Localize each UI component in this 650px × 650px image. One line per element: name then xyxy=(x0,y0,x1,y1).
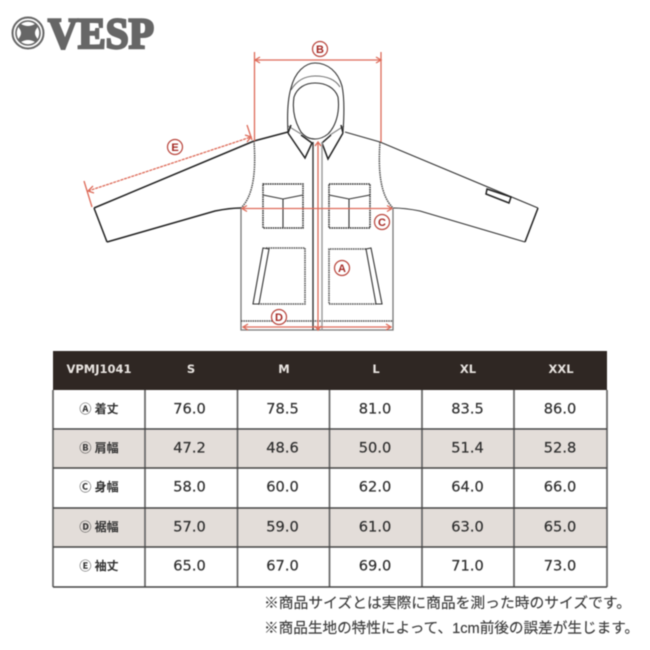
jacket body xyxy=(241,141,393,330)
row D: hem width: Ⓓ 裾幅 xyxy=(79,519,119,534)
right chest pocket xyxy=(329,184,370,228)
row E: sleeve length: 69.0 xyxy=(359,558,391,574)
left sleeve xyxy=(94,132,288,242)
row B: shoulder width: 48.6 xyxy=(266,440,299,456)
logo wordmark: VESP xyxy=(48,11,154,58)
row C: body width: 66.0 xyxy=(544,478,576,496)
table grid xyxy=(53,390,607,587)
measurement B: shoulder width xyxy=(254,42,381,142)
table header row: XXL xyxy=(548,362,574,376)
collar xyxy=(288,125,343,159)
row A: length: Ⓐ 着丈 xyxy=(79,401,119,416)
right lower pocket xyxy=(329,248,382,304)
row B: shoulder width: 51.4 xyxy=(451,440,484,456)
row C: body width: 60.0 xyxy=(266,478,299,496)
row C: body width: 62.0 xyxy=(359,478,391,496)
hood xyxy=(288,63,344,139)
size table xyxy=(53,351,607,587)
table header row xyxy=(53,351,607,390)
measurement E: sleeve length xyxy=(84,125,252,207)
table header row: L xyxy=(372,362,380,376)
measurement A: length xyxy=(315,142,350,330)
row A: length: 78.5 xyxy=(266,400,299,418)
table header row: VPMJ1041 xyxy=(66,362,132,376)
row D: hem width: 65.0 xyxy=(544,518,576,536)
row E: sleeve length: 65.0 xyxy=(173,558,206,574)
row E: sleeve length: 71.0 xyxy=(451,558,484,574)
row A: length: 81.0 xyxy=(359,400,391,418)
measurement E: sleeve length: E xyxy=(171,142,179,154)
measurement D: hem width xyxy=(243,310,391,330)
table header row: XL xyxy=(460,362,477,376)
row B: shoulder width: 50.0 xyxy=(359,440,391,456)
logo: VESP xyxy=(12,11,154,58)
table header row: S xyxy=(187,362,195,376)
row B: shoulder width: 47.2 xyxy=(173,440,206,456)
row B: shoulder width: 52.8 xyxy=(544,440,576,456)
row C: body width: Ⓒ 身幅 xyxy=(79,479,119,494)
right sleeve xyxy=(345,132,538,242)
row A: length: 83.5 xyxy=(451,400,484,418)
footnote 2: ※商品生地の特性によって、1cm前後の誤差が生じます。 xyxy=(264,620,639,637)
row A: length: 76.0 xyxy=(173,400,206,418)
row E: sleeve length: 67.0 xyxy=(266,558,299,574)
shaded row backgrounds xyxy=(54,430,607,547)
jacket technical drawing xyxy=(94,63,538,330)
row C: body width: 64.0 xyxy=(451,478,484,496)
row D: hem width: 57.0 xyxy=(173,518,206,536)
row E: sleeve length xyxy=(79,558,576,574)
sleeve patch xyxy=(486,189,511,203)
row C: body width: 58.0 xyxy=(173,478,206,496)
row C: body width xyxy=(79,478,576,496)
measurement C: body width xyxy=(242,206,392,230)
row A: length xyxy=(79,400,576,418)
left lower pocket xyxy=(253,248,305,304)
row D: hem width: 61.0 xyxy=(359,518,391,536)
row E: sleeve length: Ⓔ 袖丈 xyxy=(79,558,119,573)
measurement C: body width: C xyxy=(378,217,386,229)
logo emblem xyxy=(12,18,44,48)
table header row: M xyxy=(278,362,290,376)
row A: length: 86.0 xyxy=(544,400,576,418)
row D: hem width: 59.0 xyxy=(266,518,299,536)
left chest pocket xyxy=(263,184,303,228)
measurement B: shoulder width: B xyxy=(316,44,324,56)
footnotes xyxy=(264,595,639,637)
measurement D: hem width: D xyxy=(275,312,283,324)
row B: shoulder width xyxy=(79,440,576,456)
footnote 1: ※商品サイズとは実際に商品を測った時のサイズです。 xyxy=(264,595,631,612)
zipper xyxy=(313,142,322,330)
measurement A: length: A xyxy=(338,263,346,275)
row E: sleeve length: 73.0 xyxy=(544,558,576,574)
row D: hem width xyxy=(79,518,576,536)
row B: shoulder width: Ⓑ 肩幅 xyxy=(79,440,119,455)
row D: hem width: 63.0 xyxy=(451,518,484,536)
